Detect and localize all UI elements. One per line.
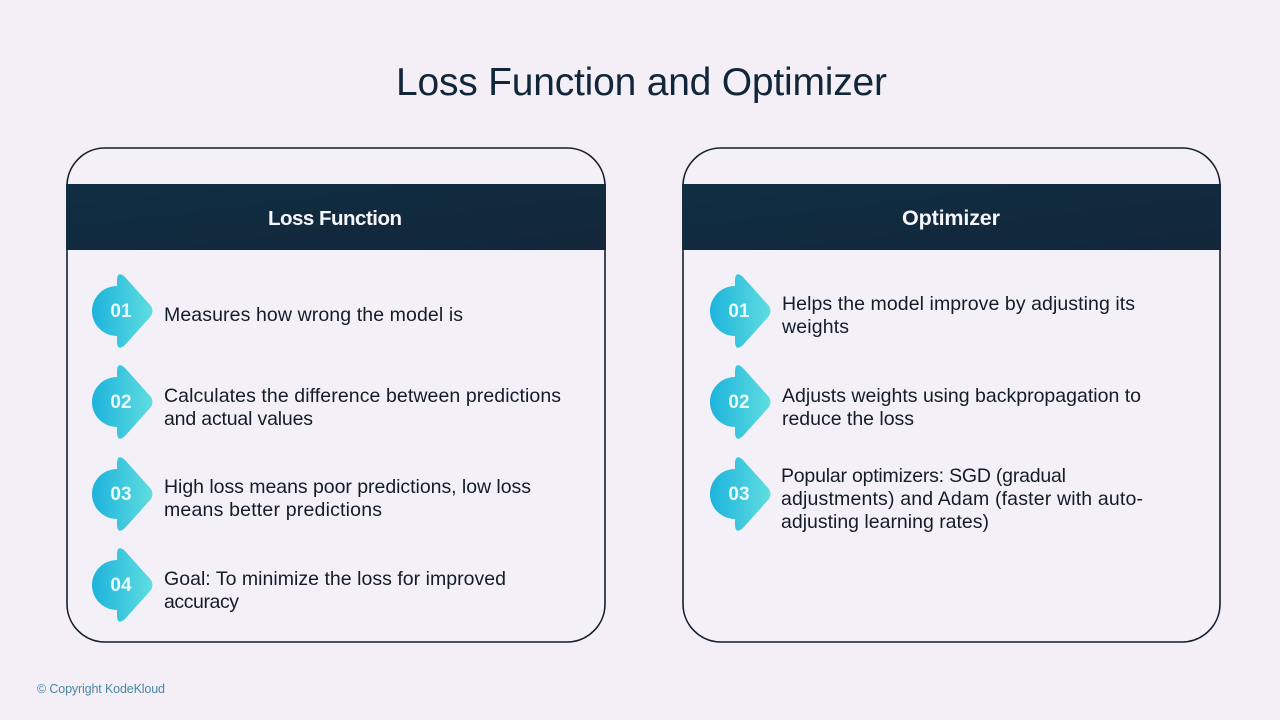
text: item 03: adjustments) and Adam (faster with auto-	[781, 488, 1143, 510]
icon: badge 01: 01	[728, 301, 750, 322]
panel outline: optimizer	[683, 148, 1220, 642]
icon: badge 03	[92, 457, 152, 531]
text: item 02: Adjusts weights using backpropagation to	[782, 385, 1141, 407]
header bar: optimizer	[682, 184, 1221, 250]
text: item 04: accuracy	[164, 591, 239, 613]
item 01: loss function	[92, 274, 463, 348]
item 04: loss function	[92, 548, 506, 622]
icon: badge 04	[92, 548, 152, 622]
item 02: loss function	[92, 365, 561, 439]
item 03: optimizer	[710, 457, 1143, 533]
text: item 03: High loss means poor predictions, low loss	[164, 476, 531, 498]
header bar: loss function	[66, 184, 606, 250]
heading: optimizer: Optimizer	[902, 206, 1001, 230]
icon: badge 02	[92, 365, 152, 439]
text: item 03: Popular optimizers: SGD (gradual	[781, 465, 1066, 487]
text: item 01	[781, 293, 1135, 338]
text: item 03	[781, 465, 1143, 533]
icon: badge 03	[710, 457, 770, 531]
icon: badge 03: 03	[110, 484, 132, 505]
text: item 04: Goal: To minimize the loss for improved	[164, 568, 506, 590]
text: item 01: Measures how wrong the model is	[164, 304, 463, 326]
icon: badge 02: 02	[728, 392, 750, 413]
text: item 02	[164, 385, 561, 430]
text: item 01: weights	[781, 316, 849, 338]
icon: badge 01: 01	[110, 301, 132, 322]
text: item 04	[164, 568, 506, 613]
panel: optimizer	[682, 148, 1221, 642]
copyright footer: © Copyright KodeKloud	[37, 682, 165, 696]
panel outline: loss function	[67, 148, 605, 642]
item 03: loss function	[92, 457, 531, 531]
icon: badge 04: 04	[110, 575, 132, 596]
item 02: optimizer	[710, 365, 1141, 439]
text: item 02	[782, 385, 1141, 430]
icon: badge 02: 02	[110, 392, 132, 413]
text: item 01: Helps the model improve by adjusting its	[782, 293, 1135, 315]
icon: badge 01	[710, 274, 770, 348]
text: item 02: reduce the loss	[782, 408, 914, 430]
icon: badge 01	[92, 274, 152, 348]
text: item 02: Calculates the difference between predictions	[164, 385, 561, 407]
text: item 03	[164, 476, 531, 521]
text: item 02: and actual values	[164, 408, 313, 430]
panel: loss function	[66, 148, 606, 642]
text: item 03: adjusting learning rates)	[781, 511, 989, 533]
icon: badge 02	[710, 365, 770, 439]
heading: loss function: Loss Function	[268, 207, 402, 230]
title: Loss Function and Optimizer	[396, 61, 887, 104]
item 01: optimizer	[710, 274, 1135, 348]
icon: badge 03: 03	[728, 484, 750, 505]
text: item 03: means better predictions	[164, 499, 382, 521]
